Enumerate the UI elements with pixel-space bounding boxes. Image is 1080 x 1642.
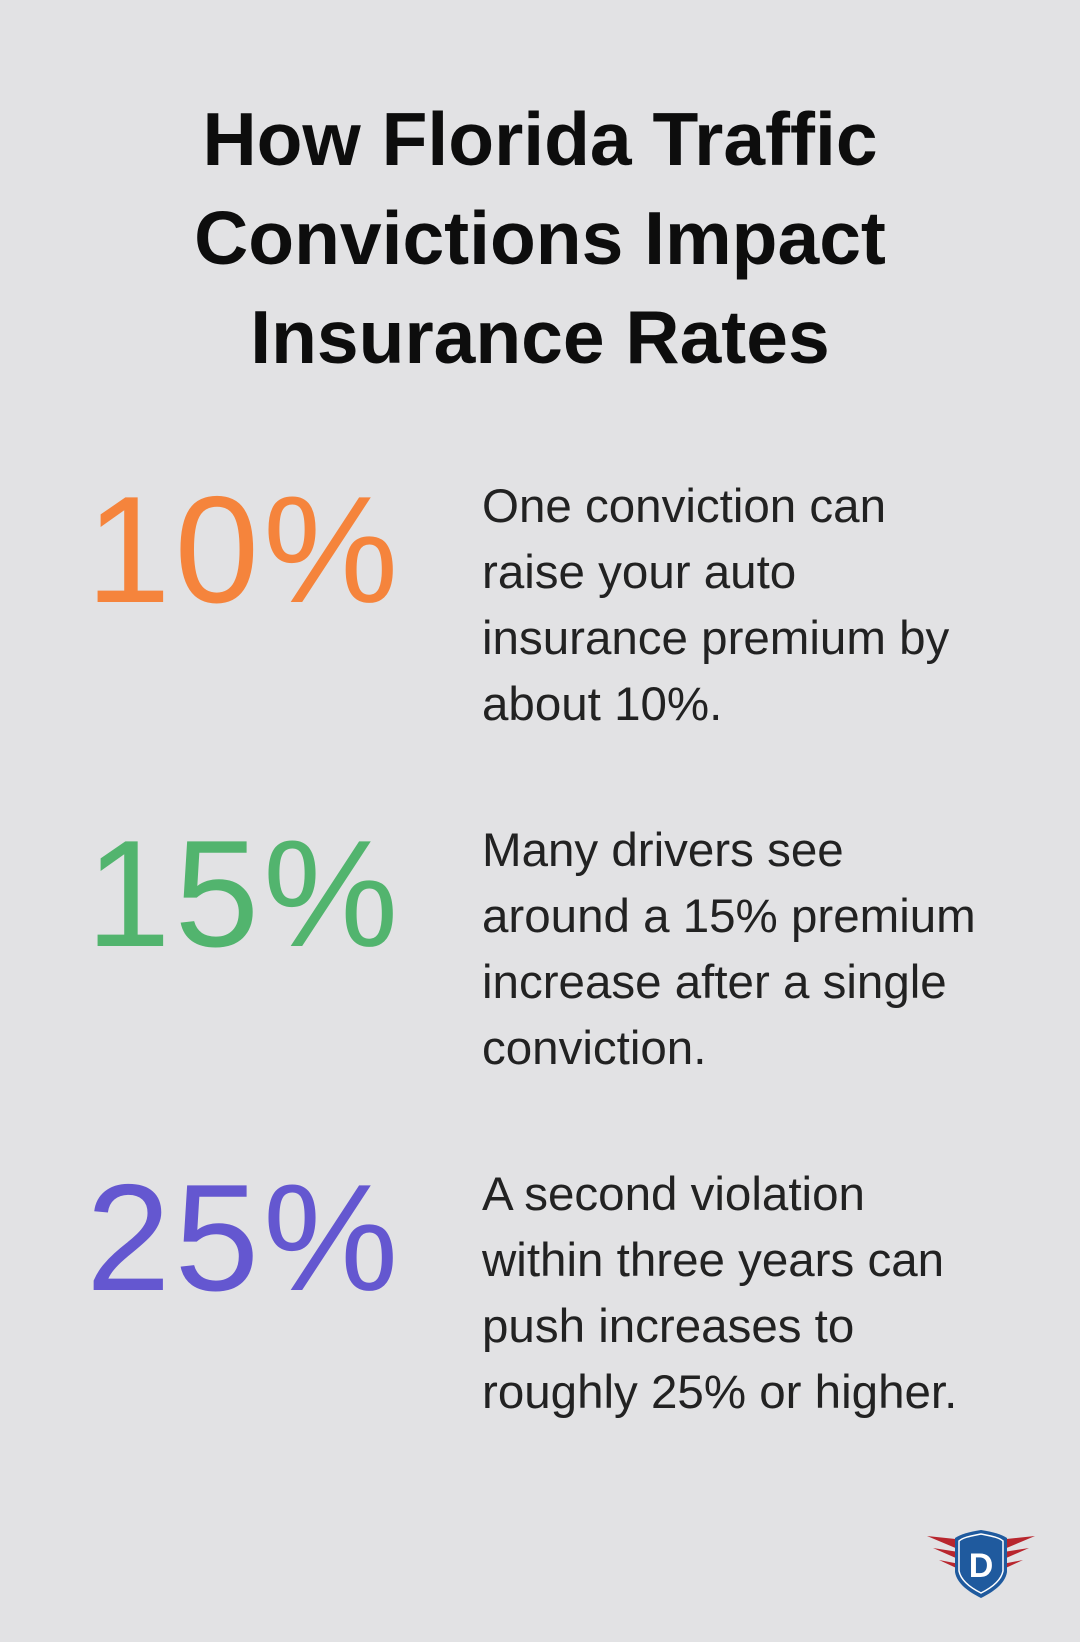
description text xyxy=(482,1168,957,1419)
description text: roughly 25% or higher. xyxy=(482,1366,957,1419)
description text: raise your auto xyxy=(482,546,796,599)
big number 25%: 25% xyxy=(86,1153,402,1323)
description text: A second violation xyxy=(482,1168,865,1221)
big number 10%: 10% xyxy=(86,465,402,635)
description text: conviction. xyxy=(482,1022,706,1075)
description text: around a 15% premium xyxy=(482,890,976,943)
title xyxy=(194,97,886,379)
icon: shield logo xyxy=(927,1530,1035,1598)
stat row: 15% xyxy=(86,809,976,1075)
description text: push increases to xyxy=(482,1300,854,1353)
icon: shield logo: D xyxy=(969,1547,993,1585)
description text: increase after a single xyxy=(482,956,947,1009)
description text xyxy=(482,824,976,1075)
description text: One conviction can xyxy=(482,480,886,533)
description text: Many drivers see xyxy=(482,824,844,877)
title: Convictions Impact xyxy=(194,196,886,280)
description text: insurance premium by xyxy=(482,612,949,665)
title: How Florida Traffic xyxy=(202,97,878,181)
big number 15%: 15% xyxy=(86,809,402,979)
description text: about 10%. xyxy=(482,678,722,731)
title: Insurance Rates xyxy=(250,295,830,379)
stat row: 25% xyxy=(86,1153,957,1419)
description text: within three years can xyxy=(482,1234,944,1287)
description text xyxy=(482,480,950,731)
stat row: 10% xyxy=(86,465,950,731)
